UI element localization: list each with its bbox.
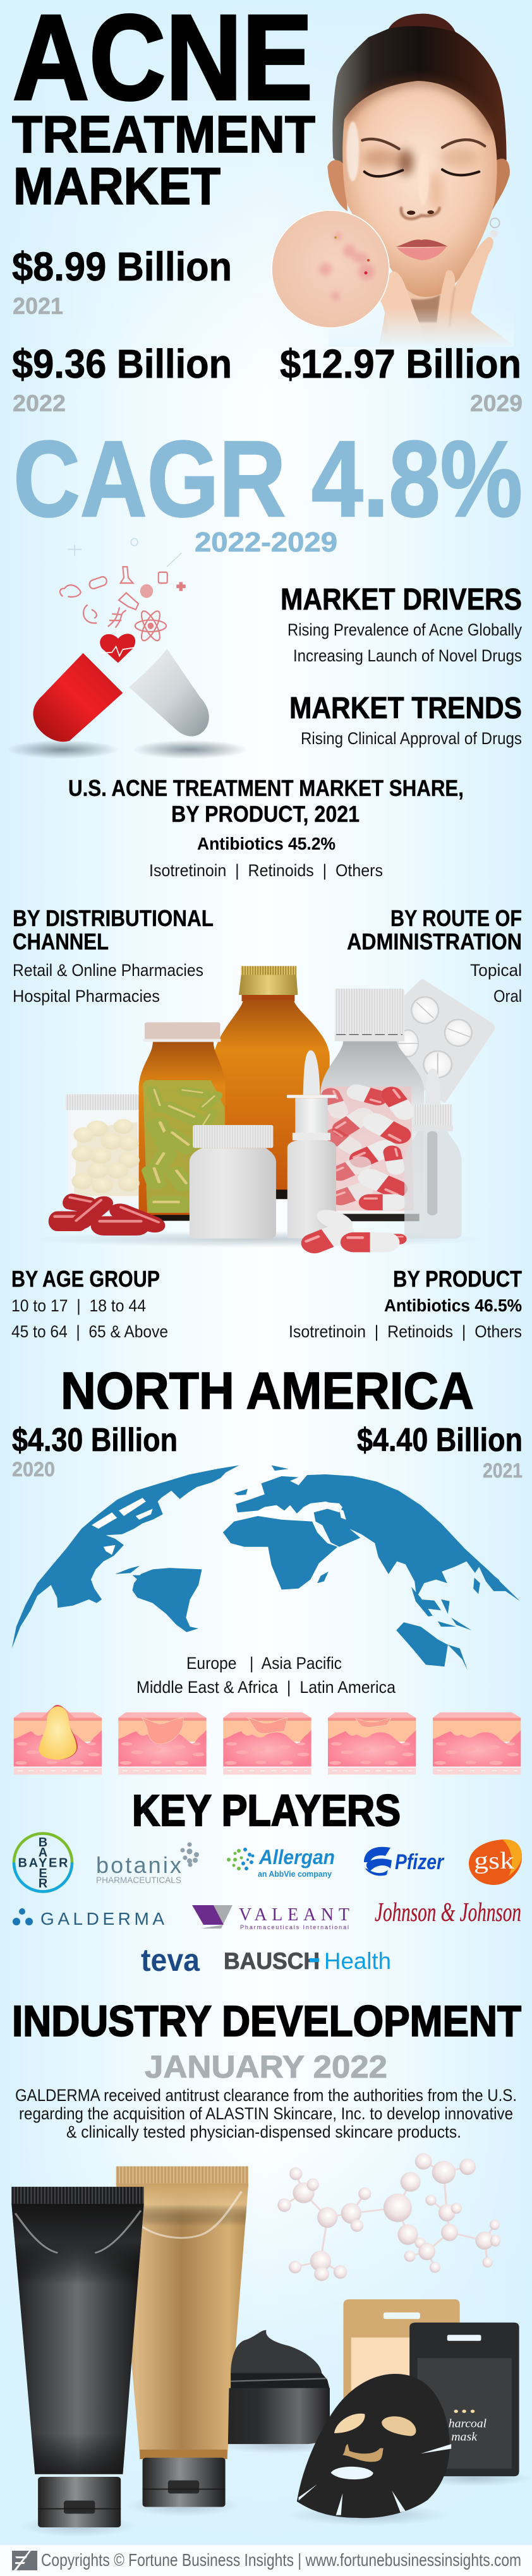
logo: Bayer: E — [39, 1867, 47, 1881]
logo: Galderma: GALDERMA — [40, 1909, 164, 1929]
logo: Bayer: A — [39, 1846, 47, 1860]
sheet mask — [297, 2374, 451, 2518]
title: TREATMENT — [12, 105, 315, 164]
sachet: charcoal mask: mask — [451, 2431, 477, 2444]
illustration: medicine bottles and pills — [33, 966, 495, 1257]
segment: distribution channel — [13, 905, 214, 1006]
logo: Bausch Health: BAUSCH — [224, 1948, 320, 1974]
segment: distribution channel: Hospital Pharmacies — [13, 987, 160, 1006]
skin panel 3: shallow crater — [223, 1712, 311, 1774]
segment: route of administration — [347, 905, 522, 1006]
black tube — [11, 2187, 144, 2527]
heading: U.S. market share: Isotretinoin | Retinoids | Others — [149, 861, 383, 880]
stat: 2029 market size — [280, 341, 523, 416]
heading: market trends — [289, 692, 522, 748]
segment: distribution channel: Retail & Online Pharmacies — [13, 961, 203, 980]
logo: GSK — [469, 1839, 522, 1885]
stat: North America 2020 — [12, 1422, 178, 1481]
footer — [0, 2545, 532, 2576]
molecule — [277, 2153, 500, 2281]
segment: distribution channel: CHANNEL — [13, 929, 109, 954]
segment: age group: 10 to 17 | 18 to 44 — [11, 1296, 146, 1315]
cosmetic jar — [228, 2330, 330, 2444]
logo: Bayer: R — [39, 1877, 48, 1891]
stat: North America 2020: 2020 — [12, 1458, 55, 1481]
stat: North America 2021: 2021 — [483, 1459, 523, 1482]
segment: age group: BY AGE GROUP — [11, 1266, 160, 1292]
red capsules — [49, 1192, 169, 1236]
callout: skin close-up circle — [272, 210, 389, 328]
stat: 2022 market size: $9.36 Billion — [12, 341, 232, 387]
logo: Valeant: VALEANT — [239, 1905, 349, 1925]
illustration: skincare products — [11, 2153, 532, 2537]
logo: Pfizer — [364, 1847, 444, 1876]
stat: 2021 market size: 2021 — [13, 293, 63, 319]
segment: by product: Antibiotics 46.5% — [384, 1296, 522, 1315]
text block: Galderma development: & clinically tested physician-dispensed skincare products. — [66, 2122, 461, 2141]
capsule: red half — [33, 653, 123, 742]
logo: Allergan: Allergan — [258, 1846, 335, 1869]
stat: 2022 market size: 2022 — [13, 390, 66, 416]
other regions list: Europe | Asia Pacific — [186, 1654, 342, 1673]
skin panel 1: pimple — [14, 1705, 102, 1774]
segment: age group — [11, 1266, 168, 1341]
logo: Bayer: BAYER — [18, 1856, 68, 1870]
heading: U.S. market share — [68, 775, 464, 880]
skin healing stages — [14, 1705, 521, 1774]
heading: U.S. market share: U.S. ACNE TREATMENT MARKET SHARE, — [68, 775, 464, 801]
segment: age group: 45 to 64 | 65 & Above — [11, 1322, 168, 1341]
illustration: open capsule with medical icons — [7, 538, 248, 759]
logo: Allergan — [227, 1846, 335, 1879]
illustration: woman with acne — [272, 14, 514, 347]
capsule: white half — [129, 649, 209, 737]
icon: heart with pulse — [100, 634, 136, 663]
stat: 2021 market size: $8.99 Billion — [12, 244, 232, 289]
stat: North America 2020: $4.30 Billion — [12, 1422, 178, 1459]
logo: Allergan: an AbbVie company — [258, 1869, 332, 1879]
dropper bottle — [404, 1069, 462, 1239]
gold tube — [116, 2166, 248, 2507]
skin panel 2: deep crater — [118, 1712, 207, 1774]
logo: Bayer: B — [39, 1836, 47, 1850]
stat: North America 2021 — [357, 1422, 523, 1482]
title: MARKET — [13, 157, 221, 215]
stat: 2029 market size: 2029 — [470, 390, 523, 416]
logo: Valeant — [192, 1905, 349, 1930]
logo: Bayer — [14, 1833, 72, 1891]
stat: 2021 market size — [12, 244, 232, 319]
segment: distribution channel: BY DISTRIBUTIONAL — [13, 905, 214, 931]
heading: market drivers — [281, 583, 522, 665]
title — [12, 0, 315, 215]
other regions list: Middle East & Africa | Latin America — [136, 1678, 396, 1697]
logo: Botanix Pharmaceuticals: botanix — [96, 1852, 181, 1878]
skin panel 4: nearly healed — [328, 1712, 416, 1774]
world map globe — [12, 1466, 520, 1670]
shadows under capsule — [7, 740, 248, 759]
logo: Botanix Pharmaceuticals: PHARMACEUTICALS — [96, 1875, 181, 1885]
logo: Botanix Pharmaceuticals — [96, 1842, 199, 1885]
footer logo — [12, 2551, 37, 2570]
logo: Bausch Health — [224, 1948, 391, 1974]
stat: 2029 market size: $12.97 Billion — [280, 341, 521, 387]
red and white capsules — [296, 1205, 407, 1257]
stat: 2022 market size — [12, 341, 232, 416]
amber bottle large — [214, 966, 330, 1199]
icons: medical line art — [60, 567, 186, 643]
sachet: charcoal mask: harcoal — [449, 2417, 487, 2430]
ground shadow — [33, 1231, 484, 1248]
heading: U.S. market share: BY PRODUCT, 2021 — [171, 801, 360, 827]
other regions list — [136, 1654, 396, 1697]
nasal spray bottle — [287, 1050, 336, 1238]
date: January 2022: JANUARY 2022 — [145, 2049, 387, 2085]
tube shadows — [20, 2437, 532, 2537]
CAGR figure: 2022-2029 — [195, 527, 337, 558]
sachet: charcoal mask — [409, 2323, 519, 2476]
logo: Pfizer: Pfizer — [395, 1850, 444, 1874]
skin panel 5: healed — [433, 1712, 521, 1774]
heading: U.S. market share: Antibiotics 45.2% — [197, 834, 336, 853]
heading: North America: NORTH AMERICA — [61, 1361, 474, 1420]
segment: by product — [289, 1266, 522, 1341]
text block: Galderma development — [15, 2086, 517, 2141]
segment: route of administration: Oral — [493, 987, 522, 1006]
icons: pale molecule, cart and syringe — [68, 538, 181, 567]
logo: Bausch Health: Health — [324, 1948, 391, 1974]
sachet: gold — [343, 2299, 460, 2432]
blister pack — [397, 979, 495, 1104]
white jar with pale beads — [65, 1094, 140, 1203]
heading: key players: KEY PLAYERS — [132, 1786, 401, 1835]
logo: Teva: teva — [141, 1942, 200, 1978]
white jar front — [190, 1125, 276, 1239]
amber bottle small with green capsules — [139, 1022, 226, 1221]
white pill bottle with capsules — [318, 989, 424, 1221]
logo: Valeant: Pharmaceuticals International — [240, 1924, 349, 1930]
segment: route of administration: Topical — [470, 961, 522, 980]
logo: GSK: gsk — [474, 1848, 514, 1874]
